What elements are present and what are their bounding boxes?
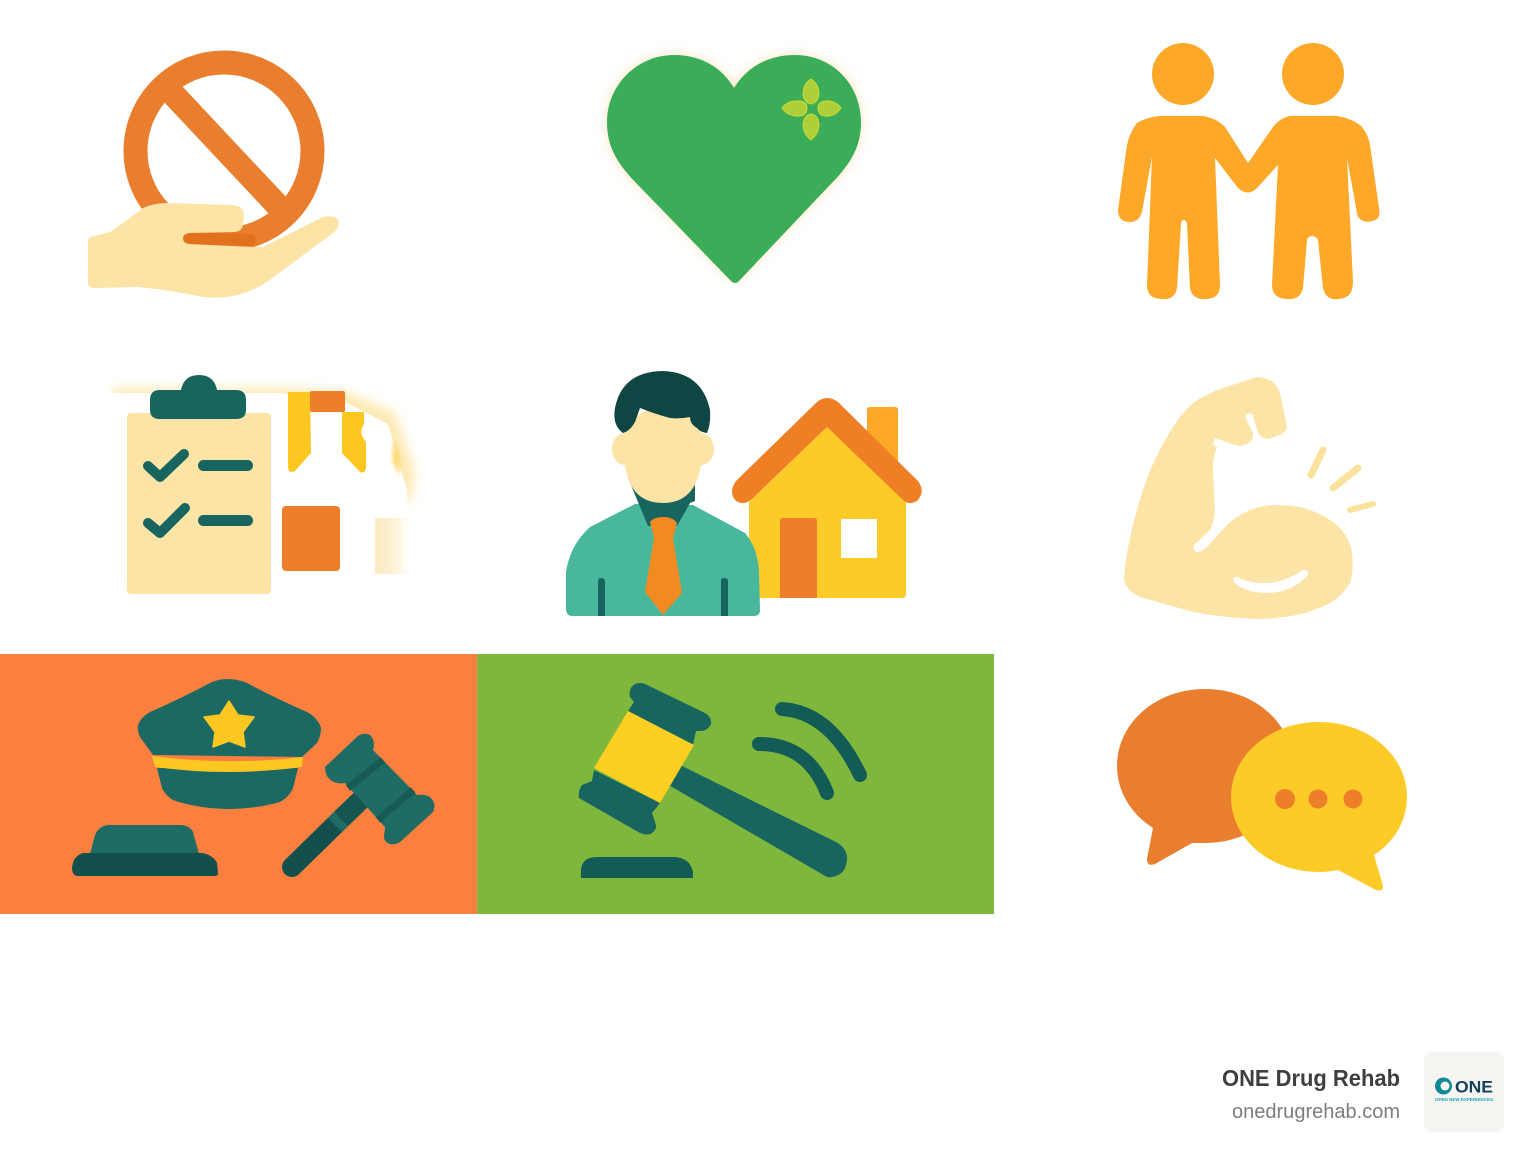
icon: man in suit beside a house — [566, 371, 922, 616]
icon: police cap — [138, 679, 321, 809]
icon: gavel — [292, 734, 434, 867]
house: walls — [749, 427, 906, 598]
icon: hand holding prohibition sign — [88, 62, 339, 298]
icon: two speech bubbles — [1117, 689, 1407, 890]
icon: clipboard checklist with faded building — [100, 375, 415, 594]
icon: sound block — [72, 825, 218, 876]
brand url: onedrugrehab.com — [1232, 1101, 1400, 1123]
house: window — [841, 519, 877, 558]
icon: gavel handle — [660, 760, 847, 877]
icon: flexed arm muscle — [1124, 377, 1373, 619]
man: tie — [645, 517, 682, 615]
man: shirt and shoulders — [566, 504, 760, 616]
house: chimney — [867, 407, 898, 470]
logo badge: ONE — [1455, 1078, 1493, 1096]
house: roof — [732, 398, 922, 503]
man: neck collar — [628, 478, 695, 526]
brand name: ONE Drug Rehab — [1222, 1065, 1400, 1091]
logo badge — [1424, 1052, 1504, 1132]
icon: sound block base — [581, 857, 693, 878]
panel: police cap and gavel on orange — [0, 654, 477, 914]
icon: green heart with flower — [607, 55, 861, 283]
man: jacket seams — [598, 578, 605, 616]
icon: sound waves — [759, 709, 860, 793]
icon: gavel head — [579, 683, 711, 834]
man: face and ears — [612, 409, 714, 503]
logo badge: OPEN NEW EXPERIENCES — [1435, 1097, 1493, 1102]
man: hair — [614, 371, 710, 433]
icon: two people holding hands — [1118, 43, 1380, 299]
panel: gavel and sound waves on green — [477, 654, 994, 914]
house: door — [780, 518, 817, 598]
